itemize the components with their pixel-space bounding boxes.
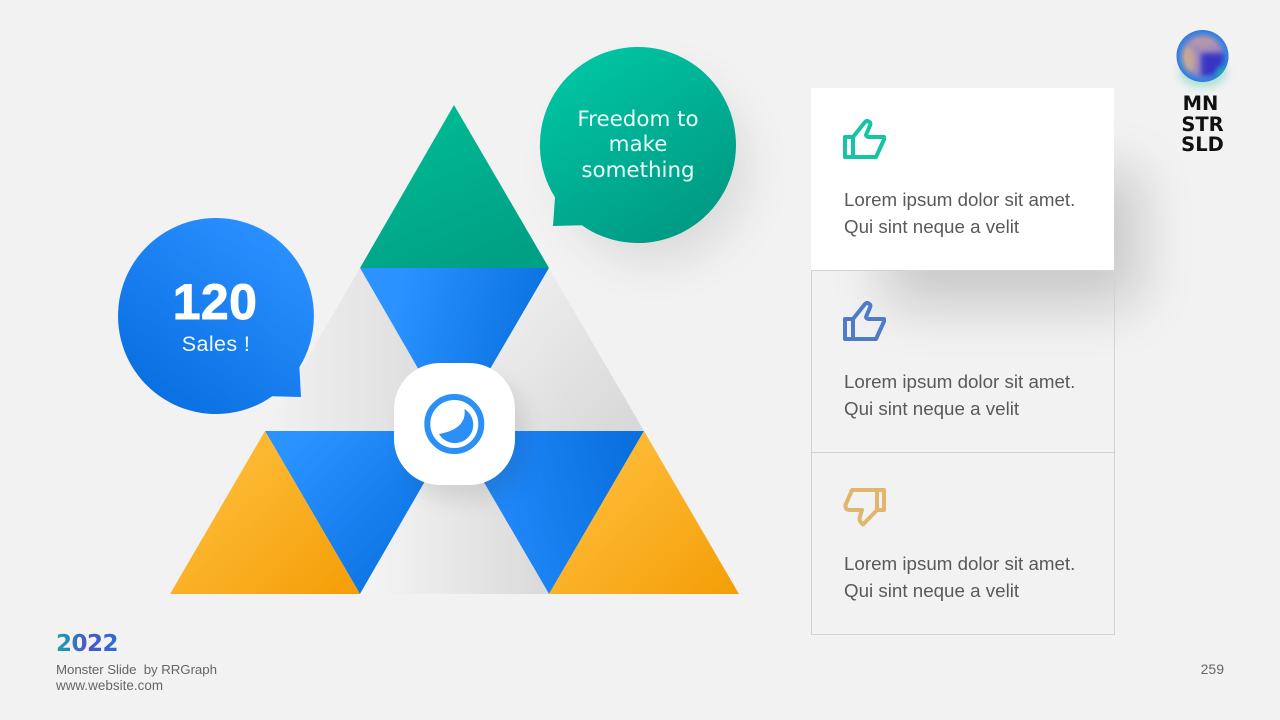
callout: 120 sales — [118, 218, 314, 414]
white card shadow — [885, 170, 1140, 305]
triangle: top green — [360, 105, 549, 268]
icon: thumbs up green — [845, 121, 884, 157]
callout: freedom to make something: Freedom to — [577, 107, 699, 132]
list row 2: Qui sint neque a velit — [844, 398, 1020, 419]
callout: freedom to make something: make — [609, 132, 667, 157]
list row 3: Qui sint neque a velit — [844, 580, 1020, 601]
triangle: left orange — [170, 431, 360, 594]
logo — [1176, 30, 1230, 156]
logo: SLD — [1181, 133, 1224, 156]
list row 3 — [844, 490, 1075, 601]
triangle: grey left — [265, 268, 454, 431]
list row 1 card: Qui sint neque a velit — [844, 216, 1020, 237]
callout: 120 sales: 120 — [173, 274, 257, 330]
center icon badge — [394, 363, 515, 485]
triangle: grey right — [454, 268, 644, 431]
list row 1 card: Lorem ipsum dolor sit amet. — [844, 189, 1075, 210]
badge shadow — [404, 378, 525, 500]
callout shadow — [565, 80, 745, 260]
callout: freedom to make something — [540, 47, 736, 243]
list panel: grey rows — [811, 270, 1115, 634]
list row 2 — [844, 303, 1075, 419]
list row 2: Lorem ipsum dolor sit amet. — [844, 371, 1075, 392]
triangle: grey bottom — [360, 431, 549, 594]
footer: credits: Monster Slide by RRGraph — [56, 662, 217, 677]
panel: triangle diagram — [170, 105, 739, 594]
logo: MN — [1183, 92, 1218, 115]
list row 1 card — [811, 88, 1114, 270]
callout: 120 sales: Sales ! — [182, 332, 250, 356]
triangle: upper blue — [360, 268, 549, 431]
list row 3: Lorem ipsum dolor sit amet. — [844, 553, 1075, 574]
triangle: right blue — [454, 431, 644, 594]
icon: thumbs down gold — [845, 490, 884, 524]
triangle: left blue — [265, 431, 454, 594]
callout: freedom to make something: something — [581, 158, 695, 183]
page number: 259 — [1201, 661, 1224, 677]
icon: thumbs up blue — [845, 303, 884, 339]
footer: credits — [55, 662, 217, 693]
footer: year: 2022 — [56, 631, 118, 657]
triangle: right orange — [549, 431, 739, 594]
footer: credits: www.website.com — [55, 678, 163, 693]
logo: STR — [1181, 113, 1224, 136]
